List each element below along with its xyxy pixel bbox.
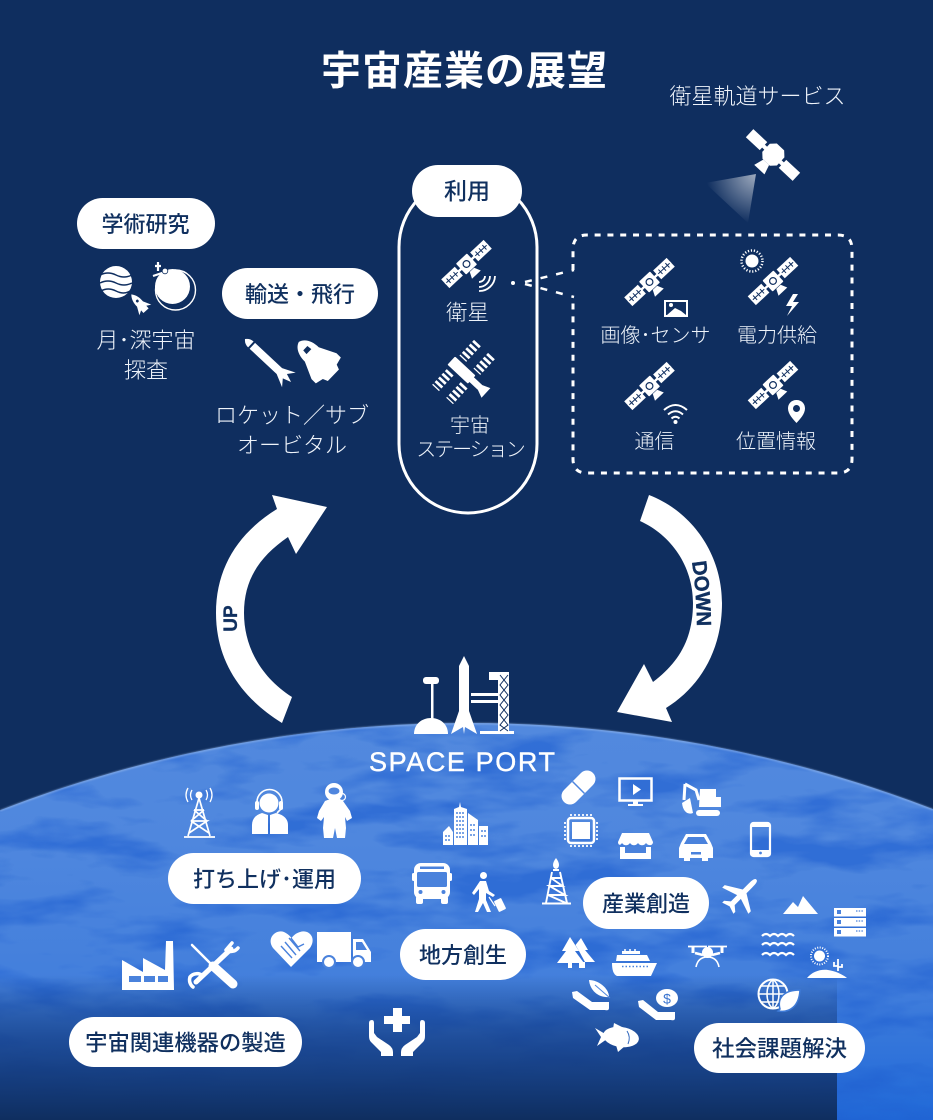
icon: tools — [190, 943, 238, 987]
label: space station — [416, 414, 525, 461]
icon: space station — [430, 338, 507, 415]
icon: handshake heart — [271, 931, 313, 967]
icon: satellite with signal — [440, 239, 498, 294]
group: launch and operation — [168, 783, 361, 904]
icon: trees — [557, 937, 595, 968]
pill: transport and flight: 輸送・飛行 — [245, 282, 355, 307]
service: communications — [623, 361, 687, 453]
icon: mountains — [783, 896, 818, 914]
arrow: up: UP — [221, 605, 242, 632]
icon: care hands with cross — [369, 1008, 425, 1056]
pill: utilization: 利用 — [444, 178, 490, 204]
label: space station: 宇宙 — [450, 414, 490, 437]
icon: capsule pill — [558, 767, 599, 808]
arrow: down — [617, 495, 722, 722]
icon: car — [679, 834, 713, 861]
pill: transport and flight — [222, 268, 378, 319]
icon: microchip — [565, 815, 597, 846]
label: rockets and suborbital — [215, 403, 369, 458]
icon: oil derrick — [542, 858, 571, 904]
icon: water waves — [762, 934, 794, 955]
pill: space equipment manufacturing — [69, 1017, 302, 1067]
pill: space equipment manufacturing: 宇宙関連機器の製造 — [85, 1030, 286, 1056]
icon: small rocket — [125, 289, 152, 316]
icon: factory — [122, 941, 174, 990]
group: space equipment manufacturing — [69, 941, 425, 1067]
icon: airplane — [715, 866, 770, 921]
icon: moon and lander — [153, 262, 196, 310]
panel: transport and flight — [215, 268, 378, 458]
label: lunar and deep space: 月･深宇宙 — [96, 328, 196, 353]
title: 宇宙産業の展望 — [321, 50, 608, 94]
pill: utilization — [412, 165, 522, 217]
icon: ship — [612, 949, 657, 976]
pill: regional revitalization: 地方創生 — [419, 943, 507, 968]
icon: bus — [412, 863, 452, 904]
icon: fish — [595, 1023, 640, 1052]
service: power supply: 電力供給 — [737, 324, 817, 347]
icon: delivery truck — [317, 932, 371, 968]
heading: satellite orbit services: 衛星軌道サービス — [669, 84, 846, 109]
label: space port: SPACE PORT — [369, 747, 555, 777]
pill: social issue solutions — [694, 1023, 865, 1073]
service: location: 位置情報 — [736, 430, 816, 453]
group: social issue solutions — [557, 896, 866, 1073]
service: location — [736, 360, 816, 453]
icon: space shuttle — [286, 329, 346, 388]
icon: storefront — [618, 833, 653, 859]
group: industry creation — [542, 767, 770, 929]
icon: server rack — [834, 908, 866, 936]
label: lunar and deep space: 探査 — [124, 358, 168, 383]
label: lunar and deep space — [96, 328, 196, 383]
icon: smartphone — [751, 823, 770, 856]
service: power supply — [737, 250, 817, 347]
icon: operator with headset — [252, 789, 288, 834]
pill: industry creation: 産業創造 — [602, 892, 690, 916]
icon: desert — [807, 948, 847, 978]
icon: orbit satellite with beam — [705, 125, 804, 223]
pill: social issue solutions: 社会課題解決 — [712, 1036, 847, 1062]
icon: video monitor — [620, 778, 652, 806]
icon: launch site — [414, 656, 514, 734]
service: imaging and sensors: 画像･センサ — [600, 324, 710, 347]
earth — [0, 720, 933, 1120]
label: satellite: 衛星 — [446, 301, 489, 325]
pill: academic research — [77, 198, 215, 249]
icon: hand with leaf — [572, 980, 610, 1010]
panel: academic research — [77, 198, 215, 383]
group: regional revitalization — [271, 802, 526, 980]
pill: academic research: 学術研究 — [101, 212, 190, 237]
icon: hand with coin: $ — [663, 990, 671, 1006]
icon: excavator — [682, 784, 721, 816]
icon: city — [443, 802, 488, 845]
panel: utilization capsule — [399, 165, 537, 513]
dashed connector lines — [511, 270, 574, 297]
icon: drone — [688, 946, 727, 967]
icon: traveller with suitcase — [472, 872, 506, 912]
icon: radio tower — [184, 788, 215, 837]
pill: launch and operations — [168, 853, 361, 904]
label: space station: ステーション — [416, 439, 525, 461]
icon: rocket — [238, 332, 298, 389]
icon: astronaut — [317, 783, 352, 838]
pill: launch and operations: 打ち上げ･運用 — [193, 867, 336, 892]
panel: satellite services — [573, 235, 852, 473]
arrow: up — [216, 495, 327, 723]
service: imaging and sensors — [600, 257, 710, 347]
label: rockets and suborbital: オービタル — [237, 433, 347, 458]
arrow: down: DOWN — [692, 561, 712, 626]
pill: regional revitalization — [400, 929, 526, 980]
icon: globe with leaf — [758, 980, 800, 1011]
pill: industry creation — [583, 877, 709, 929]
service: communications: 通信 — [634, 430, 674, 453]
icon: hand with coin — [638, 989, 678, 1020]
icon: planet — [100, 266, 132, 298]
label: rockets and suborbital: ロケット／サブ — [215, 403, 369, 428]
